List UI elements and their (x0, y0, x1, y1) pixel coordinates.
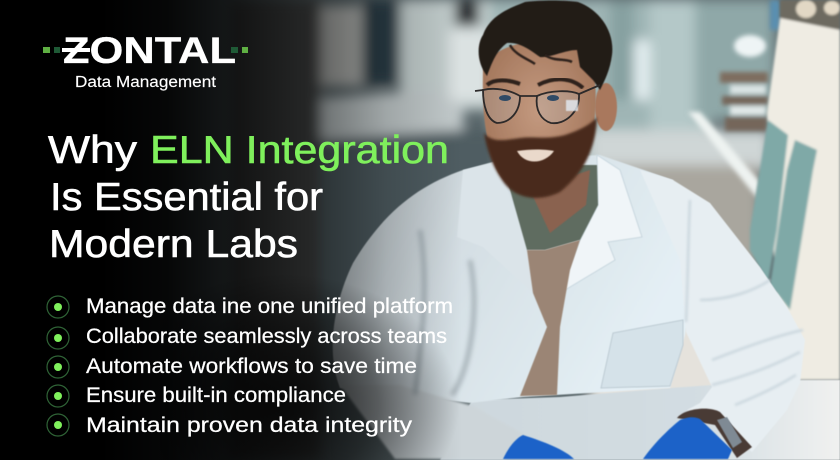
bullet item 5: Maintain proven data integrity (86, 414, 413, 437)
logo subtitle: Data Management (75, 74, 217, 91)
logo Z crossbar (62, 48, 90, 52)
bullet list (47, 295, 453, 437)
eyebrows (487, 79, 583, 88)
bullet item 1: Manage data ine one unified platform (86, 295, 453, 318)
lab coat torso (333, 155, 690, 403)
hair curl detail (510, 45, 572, 64)
coat sleeve (640, 170, 805, 452)
scientist (333, 0, 805, 459)
table (440, 380, 840, 460)
title: Modern Labs (49, 223, 298, 266)
left forearm sleeve (340, 385, 527, 459)
lens glare (566, 100, 578, 111)
logo wordmark: ZONTAL (63, 30, 236, 71)
wristwatch strap (677, 409, 752, 458)
bullet item 4: Ensure built-in compliance (86, 384, 346, 407)
right glove (643, 417, 732, 459)
eyes (499, 95, 511, 101)
title: Why (48, 129, 138, 172)
logo: ZONTAL Data Management (43, 30, 248, 91)
shirt collar (503, 165, 598, 250)
coat lapel left (457, 162, 533, 293)
title: Is Essential for (50, 176, 323, 219)
neck (530, 170, 590, 233)
coat fold shadows (415, 230, 474, 395)
beard (484, 117, 597, 198)
bullet item 2: Collaborate seamlessly across teams (86, 325, 447, 348)
title (48, 129, 449, 266)
sweater (520, 240, 580, 396)
sleeve fold shadows (686, 200, 803, 405)
watch face (717, 417, 742, 448)
glasses (475, 85, 600, 123)
coat pocket (601, 320, 683, 388)
coat collar right (560, 155, 642, 293)
title: ELN Integration (150, 129, 449, 172)
bullet item 3: Automate workflows to save time (86, 355, 417, 378)
left glove (503, 435, 574, 459)
lower dark shadow (160, 240, 460, 460)
hair (479, 0, 612, 90)
smile (517, 150, 554, 162)
face (483, 40, 596, 195)
right ear (595, 83, 617, 131)
logo squares right (231, 47, 248, 53)
logo squares left (43, 47, 60, 53)
